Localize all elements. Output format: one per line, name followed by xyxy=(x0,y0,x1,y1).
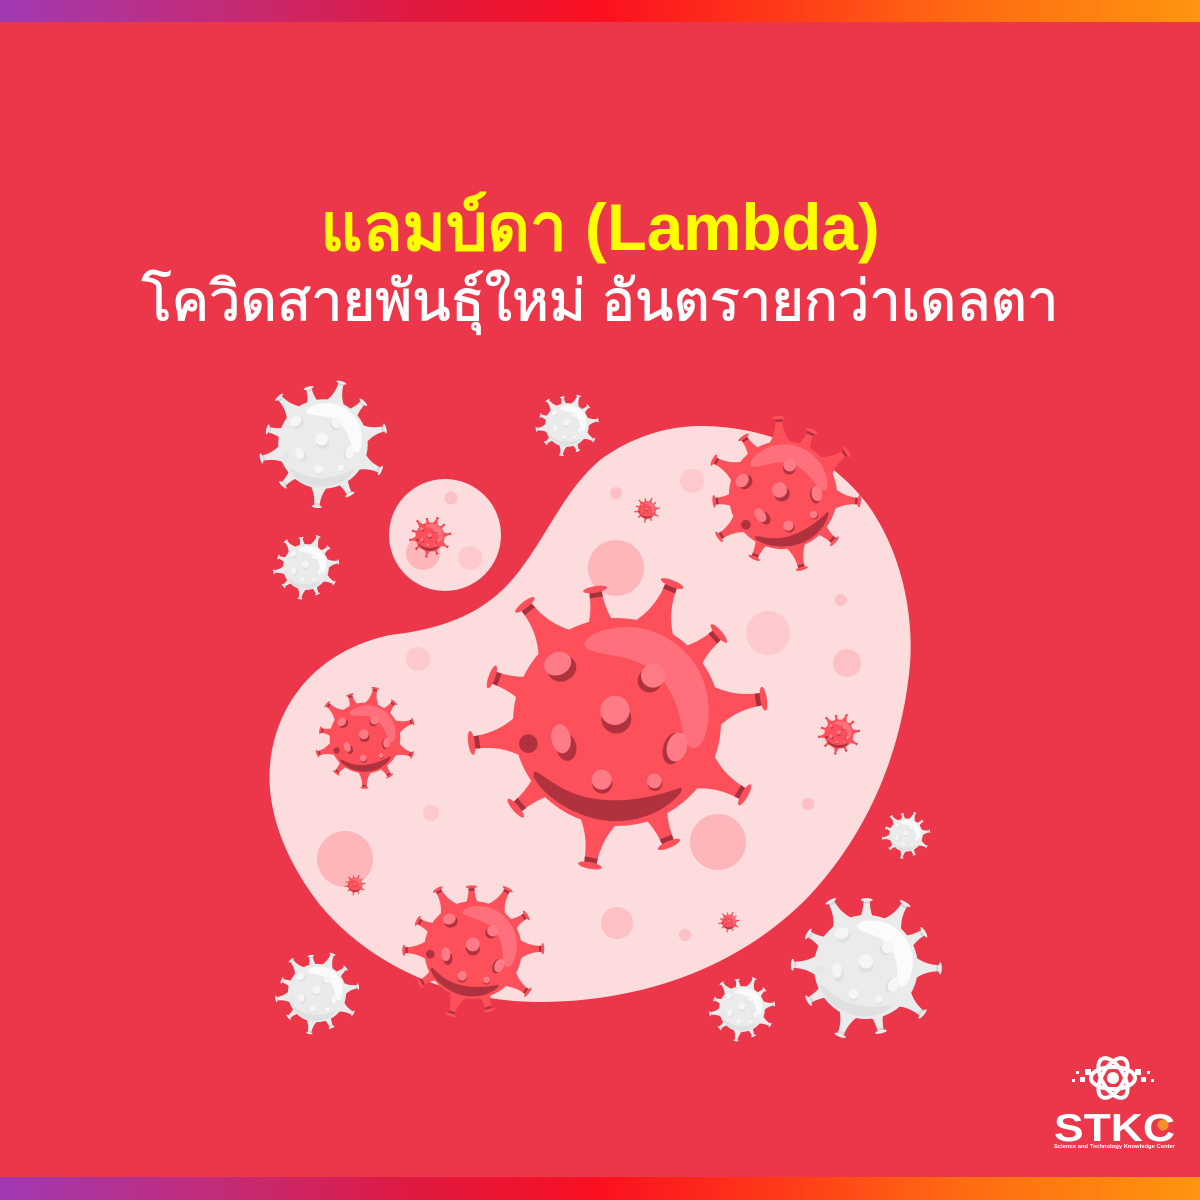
red virus bottom xyxy=(392,870,554,1030)
tiny red virus in small circle xyxy=(409,516,451,558)
icon: atom xyxy=(1072,1053,1154,1103)
background spots xyxy=(317,469,861,941)
tiny red virus top xyxy=(634,497,660,523)
red virus left xyxy=(305,679,425,797)
bottom gradient bar xyxy=(0,1177,1200,1200)
white virus left xyxy=(273,534,340,600)
tiny red virus right xyxy=(818,713,860,755)
white virus right xyxy=(882,811,931,859)
white virus bottom right xyxy=(778,880,954,1055)
white virus bottom centre xyxy=(709,976,776,1042)
logo tagline: Science and Technology Knowledge Center xyxy=(1054,1144,1176,1150)
tiny red virus lower left xyxy=(344,875,366,896)
red virus top right xyxy=(679,391,888,599)
logo wordmark: STKC xyxy=(1054,1107,1175,1150)
STKC logo xyxy=(1054,1053,1176,1150)
white virus top xyxy=(535,394,599,457)
top gradient bar xyxy=(0,0,1200,22)
tiny red virus lower right xyxy=(718,912,740,933)
main red virus xyxy=(465,572,770,873)
small pink circle xyxy=(389,479,501,591)
pink blob xyxy=(269,426,911,1002)
white virus bottom left xyxy=(274,951,360,1035)
logo orange dot xyxy=(1158,1120,1168,1130)
white virus top left xyxy=(252,374,394,514)
subtitle: โควิดสายพันธุ์ใหม่ อันตรายกว่าเดลตา xyxy=(142,269,1058,332)
title: Lambda: แลมบ์ดา (Lambda) xyxy=(320,191,880,264)
